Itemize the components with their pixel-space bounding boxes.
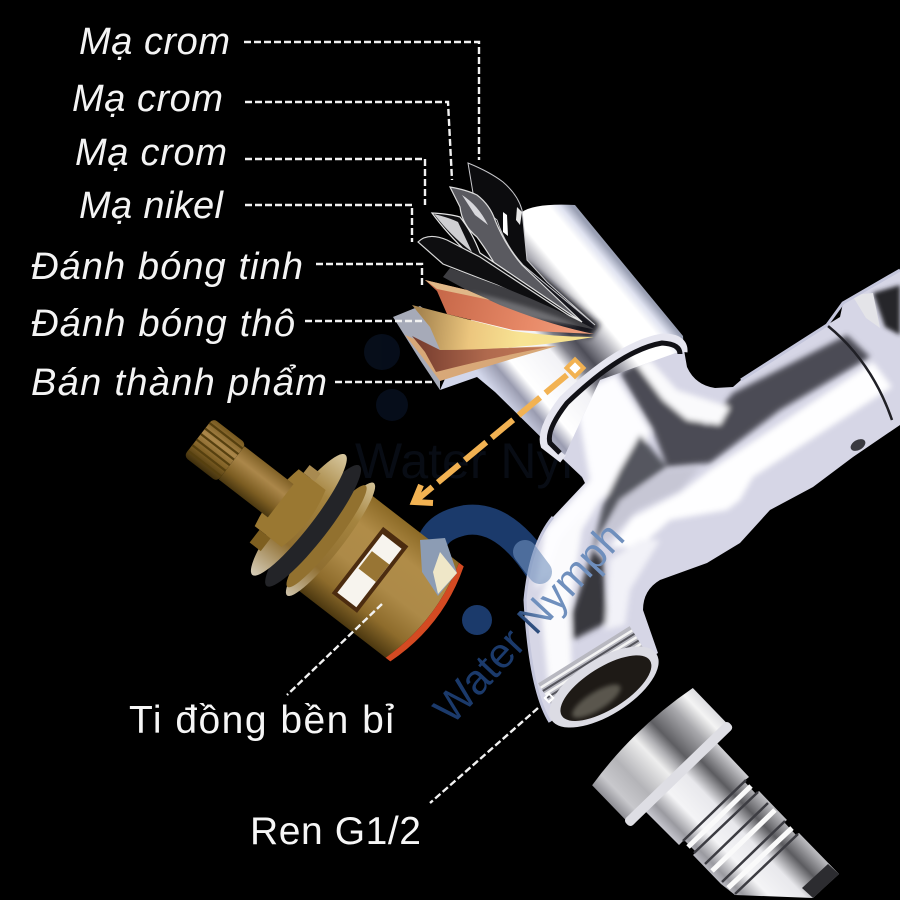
adapter grooves	[683, 780, 798, 894]
dark Y reflection	[620, 335, 870, 467]
labels: Mạ crom	[75, 132, 227, 174]
foil: chrome 2	[450, 187, 582, 322]
dark collar detail	[873, 285, 900, 335]
overlay on spout	[525, 552, 540, 572]
adapter end opening	[802, 864, 839, 898]
watermark: navy logo	[430, 520, 540, 635]
knurled head	[184, 418, 246, 482]
foil: chrome 1	[468, 163, 595, 325]
overlay on cartridge	[420, 538, 457, 596]
faucet ring	[544, 338, 683, 459]
adapter collar	[623, 720, 734, 828]
foil: yellow	[412, 305, 594, 350]
watermark: faint upper logo	[355, 334, 659, 489]
left spout highlight	[538, 534, 582, 678]
hex collar	[252, 467, 330, 550]
adapter tail	[645, 742, 839, 898]
labels: Mạ crom	[79, 21, 230, 63]
adapter head	[588, 684, 730, 823]
dark fan shadow	[455, 250, 600, 338]
foil: nickel	[418, 236, 582, 324]
hole	[850, 439, 866, 451]
dashed leader lines	[244, 42, 553, 803]
cartridge body	[297, 494, 466, 663]
foil: brown base	[405, 335, 557, 381]
upper barrel	[440, 205, 684, 459]
foil: copper	[425, 280, 594, 334]
body rim	[525, 270, 900, 722]
foil layers	[393, 163, 600, 390]
adapter highlights	[688, 786, 792, 888]
lower white band	[610, 362, 892, 547]
labels: Bán thành phẩm	[31, 362, 327, 404]
second flange	[277, 475, 384, 603]
labels: Đánh bóng thô	[31, 303, 295, 345]
labels: Ti đồng bền bỉ	[129, 699, 394, 742]
left white lobe	[535, 375, 650, 590]
labels: Mạ nikel	[79, 185, 225, 227]
orange arrow	[414, 360, 583, 503]
collar seam	[828, 326, 892, 420]
foil: chrome 3	[432, 213, 582, 322]
brass cartridge	[152, 377, 481, 680]
O-ring	[255, 457, 371, 595]
labels	[31, 21, 421, 853]
stem neck	[219, 446, 294, 517]
ceramic window	[332, 527, 408, 613]
labels: Ren G1/2	[250, 810, 421, 853]
chrome adapter	[588, 684, 839, 898]
faucet body	[440, 205, 900, 730]
highlight below ring	[635, 360, 730, 425]
watermark overlay: Water Nymph	[424, 513, 633, 732]
tube highlight	[604, 464, 696, 539]
watermark: faint upper logo: Water Nymph	[355, 433, 659, 489]
red seal	[386, 563, 472, 667]
labels: Đánh bóng tinh	[31, 246, 303, 288]
lower body and spout	[520, 265, 900, 730]
spout dark band	[572, 550, 612, 640]
foil: fine polish	[443, 268, 596, 330]
faucet mouth thread	[531, 622, 671, 744]
first flange	[241, 446, 357, 584]
labels: Mạ crom	[72, 78, 223, 120]
